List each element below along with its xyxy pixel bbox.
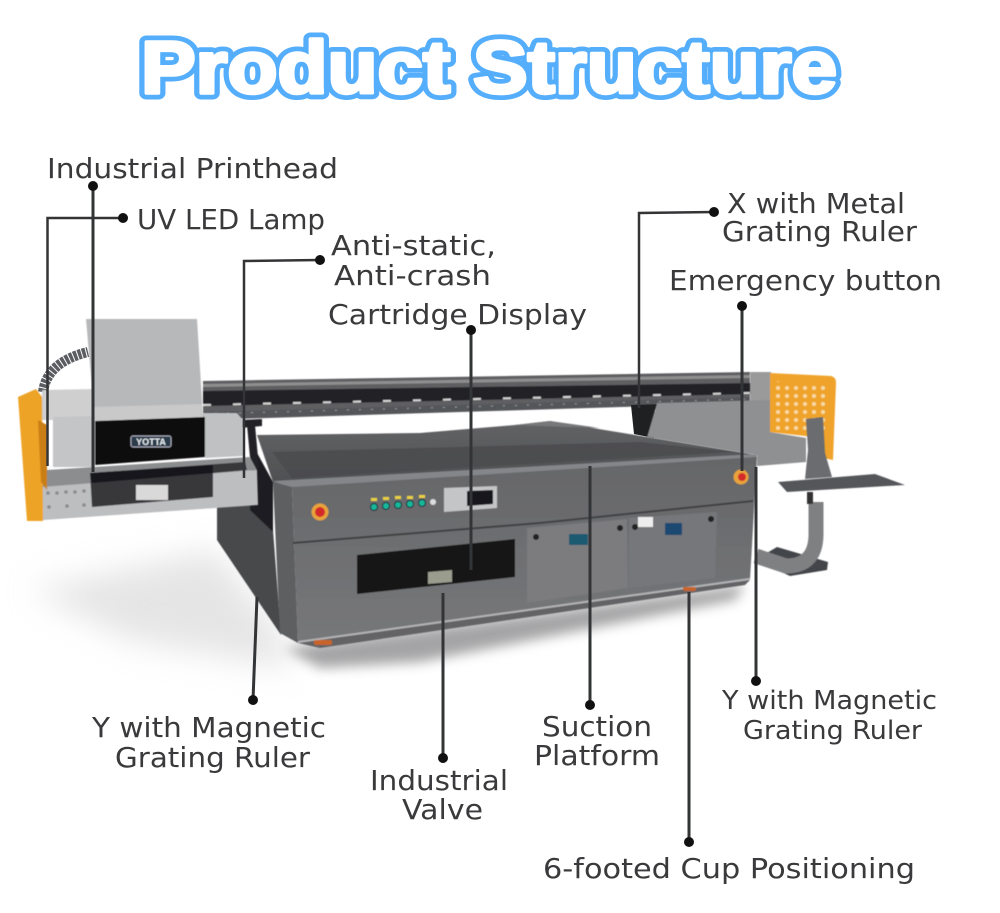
main cabinet	[217, 419, 757, 648]
door labels	[569, 534, 588, 545]
label: Suction Platform: Suction	[542, 710, 652, 743]
label: Y with Magnetic Grating Ruler left	[91, 711, 326, 774]
leader: 6-footed Cup Positioning	[684, 592, 694, 847]
print carriage	[18, 319, 258, 521]
leader: Anti-static	[244, 255, 325, 478]
label: Y with Magnetic Grating Ruler right: Grating Ruler	[743, 716, 922, 746]
label: Industrial Valve: Industrial	[370, 764, 508, 797]
leader: Emergency button	[737, 301, 747, 471]
cabinet door panels	[527, 519, 628, 603]
label: Y with Magnetic Grating Ruler right	[721, 686, 937, 746]
leader: Y with Magnetic Grating Ruler left	[248, 597, 258, 705]
title: Product Structure	[141, 26, 837, 109]
right emergency stop	[734, 470, 748, 484]
cable chain	[43, 352, 88, 392]
label: X with Metal Grating Ruler: Grating Ruler	[722, 215, 918, 248]
leader: Suction Platform	[585, 466, 595, 710]
carriage logo: YOTTA	[136, 437, 166, 447]
clamp bracket	[240, 419, 262, 468]
indicator buttons	[370, 495, 436, 510]
ground shadow	[30, 550, 745, 668]
cabinet left side	[217, 495, 281, 635]
suction platform surface	[257, 421, 757, 487]
label: Suction Platform: Platform	[534, 739, 660, 772]
title: Product Structure	[141, 26, 837, 109]
label: Industrial Valve: Valve	[402, 793, 483, 826]
label: Industrial Valve	[370, 764, 508, 826]
beam support foot	[631, 404, 669, 438]
label: 6-footed Cup Positioning: 6-footed Cup Positioning	[543, 852, 915, 885]
label: Anti-static, Anti-crash: Anti-crash	[334, 259, 491, 292]
left emergency stop	[312, 504, 328, 520]
printer illustration	[18, 319, 905, 668]
carriage connector	[250, 440, 273, 532]
operator stand	[755, 417, 905, 576]
right end table and orange guard	[647, 372, 836, 466]
window gauge	[428, 570, 452, 584]
label: Anti-static, Anti-crash	[331, 229, 496, 292]
label: Y with Magnetic Grating Ruler left: Grating Ruler	[115, 741, 311, 774]
leader: X with Metal Grating Ruler	[639, 207, 719, 408]
label: Y with Magnetic Grating Ruler right: Y with Magnetic	[721, 686, 937, 716]
black window	[357, 539, 515, 594]
leader: Industrial Valve	[438, 593, 448, 763]
label: X with Metal Grating Ruler	[722, 187, 918, 248]
label: Suction Platform	[534, 710, 660, 772]
control display	[444, 486, 497, 512]
leader: Industrial Printhead	[88, 181, 98, 472]
gantry beam	[203, 372, 755, 420]
carriage logo	[131, 436, 171, 447]
leader: Y with Magnetic Grating Ruler right	[751, 467, 761, 686]
label: X with Metal Grating Ruler: X with Metal	[727, 187, 905, 220]
label: Y with Magnetic Grating Ruler left: Y with Magnetic	[91, 711, 326, 744]
label: Industrial Printhead: Industrial Printhead	[47, 152, 338, 185]
label: Cartridge Display: Cartridge Display	[328, 298, 587, 331]
feet	[314, 587, 696, 645]
label: Anti-static, Anti-crash: Anti-static,	[331, 229, 496, 262]
leader: UV LED Lamp	[48, 213, 128, 466]
label: Emergency button: Emergency button	[669, 264, 942, 297]
cabinet front	[292, 457, 757, 643]
leader: Cartridge Display	[466, 325, 476, 570]
label: UV LED Lamp: UV LED Lamp	[137, 203, 325, 236]
